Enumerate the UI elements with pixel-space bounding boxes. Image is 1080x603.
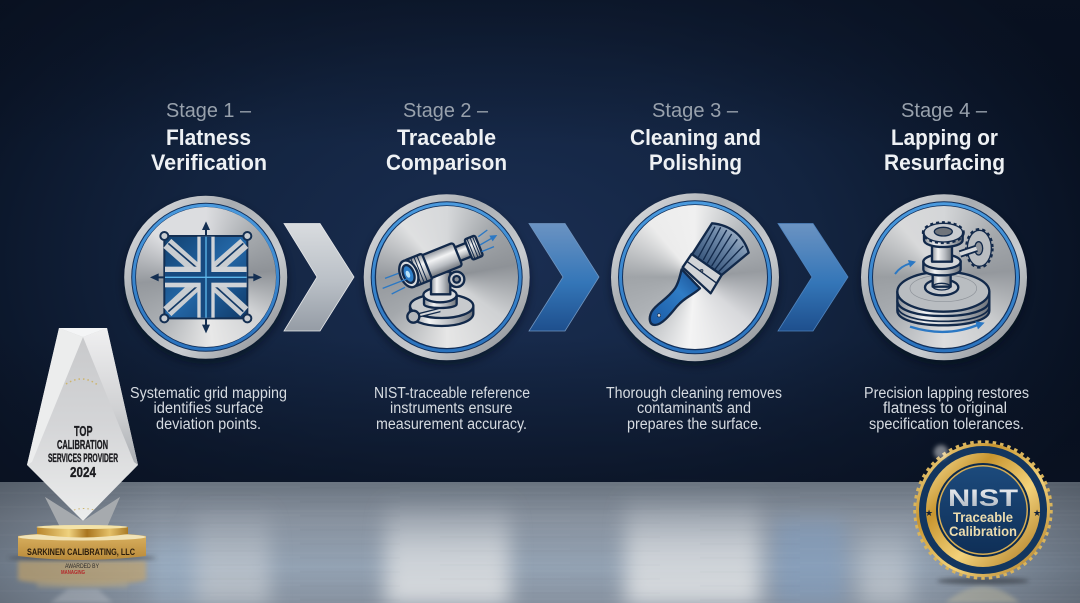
medallion 4: lapping icon <box>861 194 1027 365</box>
trophy text: 2024 <box>70 464 97 481</box>
chevron arrow 3 <box>778 224 848 331</box>
stage 4 heading: Stage 4 – <box>901 99 988 122</box>
stage 3 description: prepares the surface. <box>627 416 762 433</box>
stage 3 heading: Polishing <box>649 150 742 175</box>
stage 3 description: contaminants and <box>637 400 751 417</box>
trophy text: CALIBRATION <box>57 437 108 452</box>
NIST traceable calibration seal: NIST <box>948 485 1018 512</box>
stage 1 description <box>130 385 287 433</box>
NIST traceable calibration seal: Traceable <box>953 510 1013 525</box>
stage 4 description <box>864 385 1029 433</box>
NIST traceable calibration seal: ★ <box>925 508 933 518</box>
stage 2 heading: Traceable <box>397 125 496 150</box>
NIST traceable calibration seal: ★ <box>1033 508 1041 518</box>
stage 1 heading <box>151 99 267 175</box>
gold plinth: SARKINEN CALIBRATING, LLC <box>27 547 135 558</box>
stage 2 heading: Comparison <box>386 150 507 175</box>
NIST traceable calibration seal: Calibration <box>949 524 1017 539</box>
reflective metal floor <box>0 482 1080 603</box>
stage 2 description: measurement accuracy. <box>376 416 527 433</box>
icon: paint brush <box>650 223 749 325</box>
stage 4 heading <box>884 99 1005 175</box>
medallion 1: flatness grid icon <box>124 196 288 364</box>
stage 3 description <box>606 385 782 433</box>
stage 1 heading: Flatness <box>166 125 251 150</box>
stage 1 description: Systematic grid mapping <box>130 385 287 402</box>
stage 1 description: deviation points. <box>156 416 261 433</box>
NIST traceable calibration seal <box>915 442 1051 603</box>
background wall <box>0 0 1080 482</box>
medallion 3: brush icon <box>611 193 779 366</box>
medallion 2: telescope icon <box>364 194 530 365</box>
stage 2 description: instruments ensure <box>390 400 512 417</box>
stage 1 heading: Stage 1 – <box>166 99 252 122</box>
trophy reflection <box>18 561 146 603</box>
stage 3 description: Thorough cleaning removes <box>606 385 782 402</box>
awarded by caption: MANAGING <box>61 570 85 576</box>
award trophy <box>8 328 156 603</box>
stage 3 heading <box>630 99 761 175</box>
stage 4 description: specification tolerances. <box>869 416 1024 433</box>
stage 2 description: NIST-traceable reference <box>374 385 530 402</box>
stage 1 heading: Verification <box>151 150 267 175</box>
icon: telescope <box>383 230 497 326</box>
stage 2 heading <box>386 99 507 175</box>
stage 2 description <box>374 385 530 433</box>
chevron arrow 1 <box>284 224 354 331</box>
trophy text: TOP <box>74 424 93 440</box>
stage 1 description: identifies surface <box>154 400 264 417</box>
stage 4 description: flatness to original <box>883 400 1007 417</box>
gold plinth <box>18 525 146 560</box>
icon: lapping machine <box>895 223 991 332</box>
icon: flatness grid <box>150 221 262 333</box>
stage 4 heading: Resurfacing <box>884 150 1005 175</box>
stage 3 heading: Stage 3 – <box>652 99 739 122</box>
crystal award <box>27 328 138 527</box>
stage 4 heading: Lapping or <box>891 125 998 150</box>
awarded by caption: AWARDED BY <box>65 564 99 570</box>
chevron arrow 2 <box>529 224 599 331</box>
stage 4 description: Precision lapping restores <box>864 385 1029 402</box>
trophy text <box>48 424 118 481</box>
stage 2 heading: Stage 2 – <box>403 99 489 122</box>
trophy text: SERVICES PROVIDER <box>48 453 118 465</box>
awarded by caption <box>61 564 99 576</box>
stage 3 heading: Cleaning and <box>630 125 761 150</box>
